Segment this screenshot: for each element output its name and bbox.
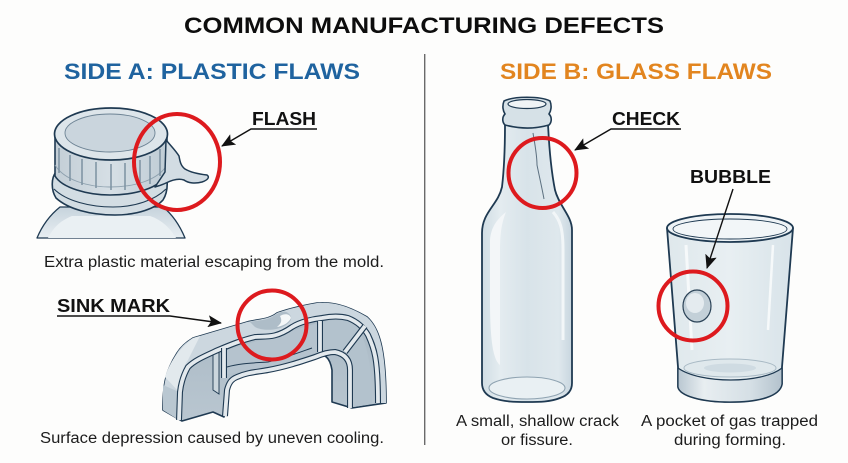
- text: bubble description: A pocket of gas trapped: [641, 413, 818, 430]
- panel: bubble defect: [658, 167, 793, 402]
- icon: drinking glass: [667, 214, 793, 402]
- center divider: [424, 54, 425, 445]
- arrow: check: [575, 129, 681, 150]
- inner panels: [227, 323, 318, 374]
- icon: plastic bottle with cap: [37, 108, 208, 238]
- heading: side A: SIDE A: PLASTIC FLAWS: [64, 59, 360, 84]
- icon: glass bottle: [482, 97, 572, 402]
- icon: trapped bubble: [683, 290, 711, 322]
- top face: [163, 303, 386, 420]
- text: check description: A small, shallow crack: [456, 413, 619, 430]
- arrow: flash: [222, 129, 317, 146]
- title: COMMON MANUFACTURING DEFECTS: [184, 13, 664, 38]
- arrow: bubble: [707, 189, 733, 268]
- callout ring: bubble: [658, 272, 728, 340]
- ribs: [224, 321, 365, 378]
- label: FLASH: FLASH: [252, 109, 316, 129]
- callout ring: check: [508, 138, 576, 208]
- front edge bands: [179, 316, 378, 420]
- callout ring: flash: [134, 114, 220, 210]
- text: sink mark description: Surface depression caused by uneven cooling.: [40, 430, 384, 447]
- text: bubble description: during forming.: [674, 432, 786, 449]
- heading: side B: SIDE B: GLASS FLAWS: [500, 59, 772, 84]
- panel: sink mark defect: [57, 290, 386, 421]
- label: BUBBLE: BUBBLE: [690, 167, 771, 187]
- text: flash description: Extra plastic material escaping from the mold.: [44, 254, 384, 271]
- callout ring: sink mark: [238, 290, 306, 360]
- label: SINK MARK: SINK MARK: [57, 296, 170, 316]
- part silhouette and side faces: [163, 303, 386, 421]
- panel: check defect: [482, 97, 681, 402]
- panel: flash defect: [37, 108, 317, 238]
- arch band: [225, 352, 350, 416]
- label: CHECK: CHECK: [612, 109, 680, 129]
- icon: ribbed plastic part: [163, 303, 386, 421]
- text: check description: or fissure.: [501, 432, 573, 449]
- arrow: sink mark: [57, 316, 221, 323]
- sink dimple: [250, 312, 291, 330]
